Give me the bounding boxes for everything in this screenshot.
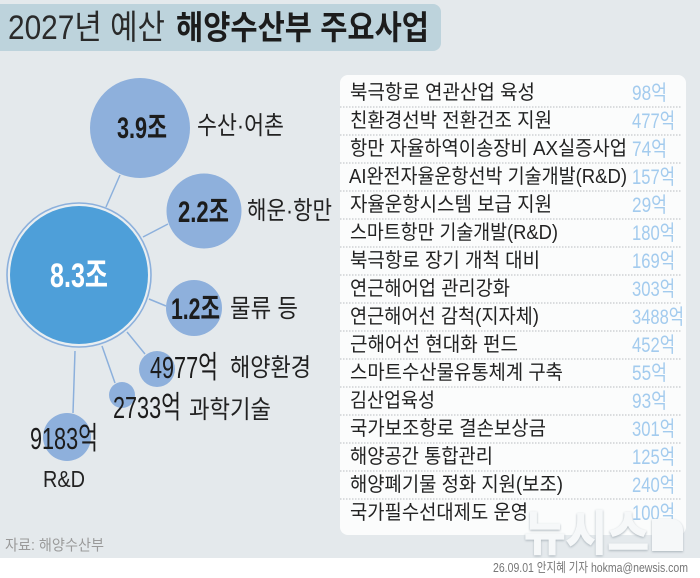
bubble: R&D 9183억: R&D — [43, 466, 85, 492]
row 3: 74억 — [632, 138, 667, 161]
watermark: 뉴시스 — [524, 508, 649, 561]
row 7: 북극항로 장기 개척 대비 — [350, 249, 540, 272]
connector lines — [73, 175, 168, 413]
bubble: total 8.3조: 8.3조 — [50, 257, 108, 295]
row 8: 연근해어업 관리강화 — [350, 277, 510, 300]
row 15: 해양폐기물 정화 지원(보조) — [350, 473, 563, 496]
row 9: 연근해어선 감척(지자체) — [350, 305, 539, 328]
row 13 — [350, 417, 675, 441]
row 12: 김산업육성 — [350, 389, 435, 412]
bubble: 물류 등 1.2조 — [166, 280, 298, 336]
bubble: 과학기술 2733억: 과학기술 — [189, 396, 271, 424]
row 12 — [350, 389, 667, 413]
row 14: 125억 — [632, 446, 675, 469]
bubble chart — [7, 78, 332, 492]
row 8 — [350, 277, 675, 301]
bubble: 수산·어촌 3.9조: 수산·어촌 — [197, 112, 284, 140]
panel: project list — [340, 75, 686, 535]
row 3: 항만 자율하역이송장비 AX실증사업 — [350, 137, 627, 160]
bubble: 수산·어촌 3.9조: 3.9조 — [117, 112, 167, 145]
row 2: 친환경선박 전환건조 지원 — [350, 109, 552, 132]
row 16: 국가필수선대제도 운영 — [350, 501, 528, 524]
bubble: 해운·항만 2.2조 — [166, 174, 332, 248]
row 11: 55억 — [632, 362, 667, 385]
row 7: 169억 — [632, 250, 675, 273]
bubble: 과학기술 2733억: 2733억 — [113, 390, 181, 425]
row 1 — [350, 81, 667, 105]
bubble: 물류 등 1.2조: 1.2조 — [171, 293, 220, 326]
row 12: 93억 — [632, 390, 667, 413]
title — [0, 4, 441, 51]
row 1: 98억 — [632, 82, 667, 105]
bubble: 해양환경 4977억: 4977억 — [150, 350, 218, 385]
bubble: 해양환경 4977억 — [139, 350, 311, 387]
bubble: 해양환경 4977억: 해양환경 — [230, 354, 311, 382]
row 5 — [350, 193, 667, 217]
bubble: 해운·항만 2.2조: 해운·항만 — [247, 197, 332, 225]
bubble: 물류 등 1.2조: 물류 등 — [230, 295, 298, 323]
source: 자료: 해양수산부 — [5, 537, 104, 554]
row 5: 29억 — [632, 194, 667, 217]
row 15 — [350, 473, 675, 497]
row 13: 301억 — [632, 418, 675, 441]
row 15: 240억 — [632, 474, 675, 497]
row 16: 100억 — [632, 502, 675, 525]
row 8: 303억 — [632, 278, 675, 301]
bubble: 과학기술 2733억 — [109, 382, 271, 425]
row 11: 스마트수산물유통체계 구축 — [350, 361, 563, 384]
row 6: 180억 — [632, 222, 675, 245]
row 2 — [350, 109, 675, 133]
row 6 — [350, 221, 675, 245]
row 10: 근해어선 현대화 펀드 — [350, 333, 518, 356]
row 13: 국가보조항로 결손보상금 — [350, 417, 546, 440]
row 1: 북극항로 연관산업 육성 — [350, 81, 535, 104]
row 7 — [350, 249, 675, 273]
bubble: total 8.3조 — [7, 203, 151, 347]
bubble: R&D 9183억: 9183억 — [30, 421, 98, 456]
title: 해양수산부 주요사업 — [176, 9, 429, 46]
row 11 — [350, 361, 667, 385]
row 5: 자율운항시스템 보급 지원 — [350, 193, 552, 216]
row 9: 3488억 — [632, 306, 684, 329]
row 14 — [350, 445, 675, 469]
bubble: 수산·어촌 3.9조 — [90, 78, 284, 178]
row 9 — [350, 305, 684, 329]
row 16 — [350, 501, 675, 525]
row 2: 477억 — [632, 110, 675, 133]
row 10 — [350, 333, 675, 357]
bubble: 해운·항만 2.2조: 2.2조 — [178, 196, 229, 229]
row 4: 157억 — [632, 166, 675, 189]
row 6: 스마트항만 기술개발(R&D) — [350, 221, 558, 244]
row 4: AI완전자율운항선박 기술개발(R&D) — [349, 165, 627, 188]
row 14: 해양공간 통합관리 — [350, 445, 493, 468]
bubble: R&D 9183억 — [30, 413, 98, 492]
row 10: 452억 — [632, 334, 675, 357]
title: 2027년 예산 — [8, 9, 165, 47]
